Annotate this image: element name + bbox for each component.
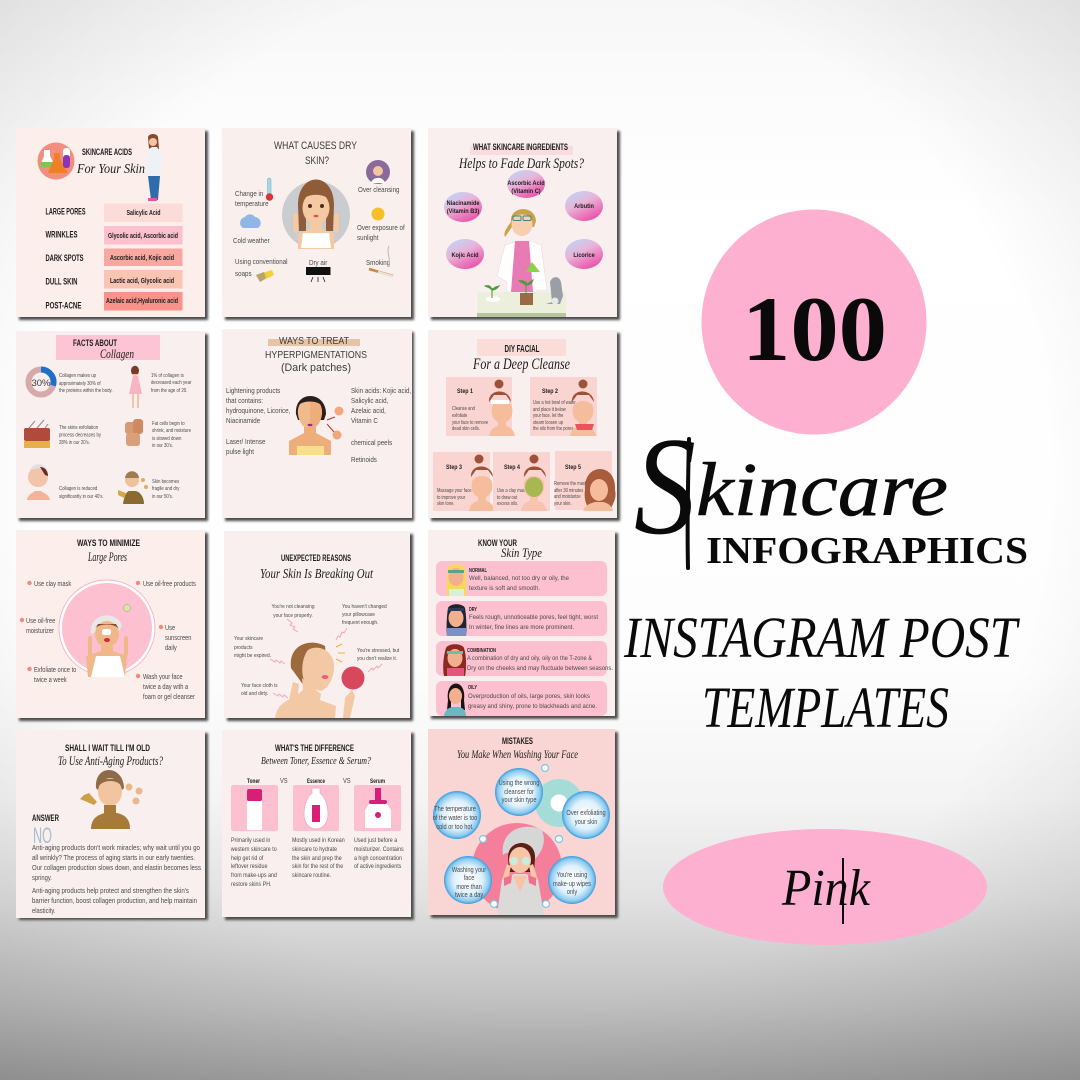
reason: stressed: you don't realize it. [357,656,397,662]
illustration: woman with dark patches [289,396,344,455]
tip: wash face: Wash your face [143,674,183,681]
panel: DIY facial [428,330,620,521]
tip: sunscreen: sunscreen [165,635,192,642]
heading: ingredients: Helps to Fade Dark Spots? [458,156,584,172]
title: Skincare: kincare [696,448,948,532]
text: serum description [354,838,404,870]
cause: soaps: soaps [235,271,252,278]
panel: hyperpigmentations [222,329,414,521]
heading: skincare acids: For Your Skin [76,162,145,177]
text: toner description: help get rid of [231,856,264,862]
fact: fifties: Skin becomes [152,479,180,485]
column labels: VS [280,778,288,785]
panel: facts about collagen [16,331,208,521]
text: essence description [292,838,345,879]
heading: collagen: FACTS ABOUT [73,338,117,348]
tip: exfoliate: Exfoliate once to [34,667,77,674]
text: serum description: Used just before a [354,838,398,844]
fact: fifties: fragile and dry [152,486,180,492]
table: acid rows: Glycolic acid, Ascorbic acid [108,231,178,240]
heading: mistakes: MISTAKES [502,736,533,747]
heading: hyperpigmentation: HYPERPIGMENTATIONS [265,350,367,361]
cause: temperature [235,178,273,208]
tip: oil-free moisturizer: moisturizer [26,628,55,635]
step 2: Use a hot bowl of water [533,400,576,405]
text: right treatments: Skin acids: Kojic acid, [351,388,411,395]
tip: exfoliate: twice a week [34,677,68,684]
bubble: make-up wipes: You're using [557,872,588,879]
fact: fat cells: Fat cells begin to [152,421,185,427]
text: right treatments: chemical peels [351,440,393,447]
icon: woman side face [27,464,50,500]
reason: expired products: Your skincare [234,636,263,642]
icon: essence bottle [293,785,339,831]
row: combination skin: Dry on the cheeks and may fluctuate between seasons. [467,665,613,672]
step 1 [446,377,515,436]
title: Infographics: INFOGRAPHICS [706,530,1028,572]
reason: pillowcase: your pillowcase [342,612,375,618]
tip: wash face [136,674,196,701]
step 2: your face. let the [533,413,564,418]
tip: exfoliate [27,667,77,684]
fact: exfoliation [59,425,102,446]
row: normal skin: texture is soft and smooth. [469,585,540,592]
icon: serum bottle [354,785,401,831]
heading: difference: WHAT'S THE DIFFERENCE [275,743,354,754]
table: acid rows: Lactic acid, Glycolic acid [110,276,174,285]
cause: smoking [366,246,393,276]
speech bubbles: (Vitamin B3) [447,208,479,215]
bubble: water temperature [433,791,481,839]
row: normal skin: NORMAL [469,568,487,574]
illustration: scientist [497,209,547,292]
fact: fat cells: shrink, and moisture [152,428,191,434]
bubble: washing too often: face [464,875,475,882]
fact: 30 percent: approximately 30% of [59,381,101,387]
reason: face cloth [241,683,288,698]
cause: cold weather: Cold weather [233,238,270,245]
heading: large pores [77,538,140,564]
text: right treatments [351,388,411,464]
table: acid rows [46,204,182,312]
badge: 100 [702,210,926,434]
row: combination skin [436,641,613,676]
fact: one percent: decreased each year [151,380,192,386]
column labels: Essence [307,778,325,785]
illustration: woman in towel [282,180,350,249]
backdrop circles [472,779,583,913]
bubble: over exfoliating: your skin [575,819,598,826]
icon: girl in pink dress [129,366,142,408]
fact: fifties [152,479,180,500]
reason: expired products: might be expired. [234,653,271,659]
illustration: lab bench [477,277,566,317]
icon: toner bottle [231,785,278,831]
illustration: woman in bathrobe [497,827,544,915]
panel: washing mistakes [428,729,618,918]
panel: skin breaking out [224,531,413,721]
bubble: wrong cleanser [495,768,543,816]
small water drops [480,764,562,908]
fact: fat cells: is slowed down [152,436,182,442]
panel: dark spot ingredients [428,128,620,320]
step 5: after 30 minutes [554,488,584,493]
table: acid rows: Salicylic Acid [126,208,161,217]
column labels [247,778,385,785]
answer text: Anti-aging products don't work miracles; why wait until you go [32,844,200,852]
reason: pillowcase [336,604,387,640]
chart: 30 percent donut: 30% [31,378,51,389]
tip: oil-free moisturizer: Use oil-free [26,618,56,625]
answer text: all wrinkly? The process of aging starts in our early twenties. [32,854,195,862]
heading: anti-aging [58,743,163,768]
row: dry skin: In winter, fine lines are more prominent. [469,624,574,631]
heading: DIY facial: For a Deep Cleanse [472,356,570,373]
bubble: water temperature: The temperature [434,806,476,813]
title: Skincare: S [634,409,696,564]
bubble: wrong cleanser: cleanser for [504,789,534,796]
speech bubbles: (Vitamin C) [511,188,541,195]
icon: flasks [38,142,74,180]
chart: 30 percent donut [28,370,54,394]
step 2: Step 2 [542,389,559,395]
heading: breaking out [260,553,374,581]
text: left treatments: that contains: [226,398,263,405]
step 3: skin tone. [437,501,455,506]
badge: 100: 100 [742,278,887,380]
text: right treatments: Salicylic acid, [351,398,388,405]
answer text: Our collagen production slows down, and elastin becomes less [32,864,201,872]
cause: sunlight [357,208,405,242]
reason: expired products [234,636,285,664]
text: right treatments: Azelaic acid, [351,408,386,415]
fact: exfoliation: process decreases by [59,432,102,439]
bubble: make-up wipes: only [567,889,578,896]
cause: temperature: temperature [235,201,269,208]
text: serum description: of active ingredients [354,864,401,870]
cause: soaps [235,259,288,282]
subtitle: Instagram post templates: INSTAGRAM POST [623,605,1020,670]
column labels: Toner [247,778,260,785]
bubble: make-up wipes: make-up wipes [553,881,591,888]
answer text: Anti-aging products help protect and strengthen the skin's [32,887,189,895]
text: essence description: the skin and prep the [292,856,342,862]
answer text: elasticity. [32,908,56,915]
panel: anti-aging [16,730,208,920]
bubble: wrong cleanser: your skin type [502,797,537,804]
speech bubbles: Niacinamide [447,200,480,207]
heading: breaking out: Your Skin Is Breaking Out [260,566,374,581]
heading: collagen [56,335,160,361]
heading: dry skin: WHAT CAUSES DRY [274,140,358,152]
subtitle: Instagram post templates: TEMPLATES [702,675,949,740]
tip: wash face: foam or gel cleanser [143,694,196,701]
text: left treatments [226,388,290,456]
text: toner description: leftover residue [231,864,268,870]
panel: skincare acids [16,128,208,320]
reason: pillowcase: frequent enough. [342,620,378,626]
heading: dry skin [274,140,358,167]
cause: sunlight: sunlight [357,235,379,242]
heading: dry skin: SKIN? [305,155,329,167]
step 2: and place it below [533,407,566,412]
reason: stressed [357,648,400,672]
heading: mistakes [457,736,578,761]
text: toner description: Primarily used in [231,838,270,844]
fact: 30 percent: the proteins within the body. [59,388,113,394]
tip: sunscreen [159,625,192,652]
step 3: Step 3 [446,465,463,471]
reason: stressed: You're stressed, but [357,648,400,654]
cause: over cleansing: Over cleansing [358,187,400,194]
speech bubbles: Arbutin [574,203,594,210]
speech bubbles: Licorice [573,252,595,259]
heading: breaking out: UNEXPECTED REASONS [281,553,351,563]
step 1: dead skin cells. [452,426,480,431]
step 1: Step 1 [457,389,474,395]
text: essence description: skin for the rest of the [292,864,344,870]
bubble: washing too often: Washing your [452,867,486,874]
heading: anti-aging: SHALL I WAIT TILL I'M OLD [65,743,150,754]
fact: one percent: 1% of collagen is [151,373,184,379]
tip: oil-free products: Use oil-free products [143,581,196,588]
step 3: Massage your face [437,488,472,493]
panel: large pores [16,530,208,721]
table: acid rows: WRINKLES [46,230,78,240]
heading: large pores: Large Pores [87,549,127,564]
answer label [32,813,59,848]
fact: fat cells: in our 30's. [152,443,173,449]
icon: doctor [146,134,162,201]
reason: not cleansing [271,604,315,632]
speech bubbles [444,170,603,269]
row: oily skin [436,681,607,716]
fact: one percent: from the age of 20. [151,388,187,394]
table: acid rows: DULL SKIN [46,276,78,288]
heading: skin type: KNOW YOUR [478,538,517,549]
step 3: to improve your [437,495,466,500]
title: Skincare [634,409,948,568]
text: toner description: western skincare to [230,847,277,853]
step 3 [433,452,495,511]
cause: dry air: Dry air [309,260,328,267]
heading: anti-aging: To Use Anti-Aging Products? [58,753,163,768]
cause: soaps: Using conventional [235,259,288,266]
bubble: water temperature: of the water is too [433,815,478,822]
row: dry skin [436,601,607,636]
answer label: ANSWER [32,813,59,824]
cause: temperature: Change in [235,191,263,198]
reason: face cloth: old and dirty. [241,691,268,697]
heading: collagen: Collagen [100,346,134,361]
heading: skincare acids: SKINCARE ACIDS [82,147,132,157]
fact: 30 percent: Collagen makes up [59,373,96,379]
tip: sunscreen: daily [165,645,178,652]
tip: oil-free moisturizer [20,618,56,635]
bubble: water temperature: cold or too hot. [436,824,474,831]
text: toner description [230,838,277,888]
reason: not cleansing: your face properly. [273,613,313,619]
table: acid rows: Azelaic acid,Hyaluronic acid [106,296,178,305]
step 1: exfoliate [452,413,468,418]
tip: clay mask: Use clay mask [34,581,72,588]
bubble: wrong cleanser: Using the wrong [499,780,540,787]
step 2: the oils from the pores [533,426,574,431]
badge: pink: Pink [781,860,871,917]
bubble: washing too often: more than [456,884,482,891]
fact: exfoliation: 28% in our 20's. [59,440,90,446]
step 4: Step 4 [504,465,521,471]
heading: large pores: WAYS TO MINIMIZE [77,538,140,549]
row: oily skin: Overproduction of oils, large pores, skin looks [468,693,591,700]
text: left treatments: hydroquinone, Licorice, [226,408,290,415]
answer label: NO [33,823,52,848]
cause: sunlight: Over exposure of [357,225,405,232]
text: left treatments: Niacinamide [226,418,260,425]
row: oily skin: greasy and shiny, prone to blackheads and acne. [468,703,597,710]
text: toner description: restore skins PH. [231,882,272,888]
tip: sunscreen: Use [165,625,176,632]
bubble: over exfoliating [562,791,610,839]
row: dry skin: Feels rough, unnoticeable pores, feel tight, worst [469,614,598,621]
step 5 [554,451,616,511]
subtitle: Instagram post templates [623,605,1020,740]
fact: exfoliation: The skins exfoliation [59,425,99,431]
text: serum description: a high concentration [354,856,402,862]
heading: hyperpigmentation: WAYS TO TREAT [279,336,349,347]
text: left treatments: Lightening products [226,388,281,395]
fact: forties: significantly in our 40's. [59,494,104,500]
panel: know your skin type [428,530,618,719]
illustration: woman with mirror [275,643,364,718]
bubble: washing too often [444,856,492,904]
table: acid rows: LARGE PORES [46,206,86,218]
cause: over cleansing [358,160,400,194]
panel: toner essence serum [222,730,414,920]
bubble: make-up wipes [548,856,596,904]
step 4: Use a clay mask [497,488,528,493]
table: acid rows: POST-ACNE [46,300,82,312]
text: left treatments: pulse light [226,449,254,456]
fact: fat cells [152,421,191,449]
text: right treatments: Vitamin C [351,418,378,425]
step 1: Cleanse and [452,406,475,411]
illustration: older woman [80,770,142,829]
reason: not cleansing: You're not cleansing [271,604,315,610]
reason: face cloth: Your face cloth is [241,683,278,689]
panel: what causes dry skin [222,128,414,320]
text: right treatments: Retinoids [351,457,377,464]
cause: smoking: Smoking [366,260,390,267]
badge: pink [663,829,987,945]
heading: hyperpigmentation [265,336,367,374]
bubble: washing too often: twice a day [455,892,484,899]
heading: DIY facial [472,339,570,373]
heading: skin type: Skin Type [501,545,542,560]
column labels: Serum [370,778,385,785]
column labels: VS [343,778,351,785]
text: toner description: from make-ups and [231,873,277,879]
text: serum description: moisturizer. Contains [354,847,404,853]
reason: pillowcase: You haven't changed [342,604,387,610]
icon: fat cells [125,419,143,446]
step 5: Step 5 [565,465,582,471]
step 5: and moisturize [554,494,581,499]
fact: one percent [151,373,192,394]
fact: forties [59,486,104,500]
text: left treatments: Laser/ Intense [226,439,266,446]
bubble: over exfoliating: Over exfoliating [566,810,606,817]
text: essence description: Mostly used in Korean [292,838,345,844]
answer text: springy. [32,875,52,882]
icon: skin cross section [24,420,50,448]
table: acid rows: DARK SPOTS [46,253,84,264]
speech bubbles: Ascorbic Acid [507,180,545,187]
tip: wash face: twice a day with a [143,684,189,691]
answer text: barrier function, boost collagen production, and help maintain [32,897,197,905]
text: essence description: skincare routine. [292,873,331,879]
row: combination skin: COMBINATION [467,648,496,654]
step 4: to draw out [497,495,518,500]
step 5: Remove the mask [554,481,588,486]
heading: ingredients [458,142,584,172]
heading: hyperpigmentation: (Dark patches) [281,362,351,374]
row: normal skin [436,561,607,596]
heading: mistakes: You Make When Washing Your Face [457,749,578,761]
row: oily skin: OILY [468,685,477,691]
heading: ingredients: WHAT SKINCARE INGREDIENTS [473,142,568,152]
heading: difference [261,743,371,767]
step 1: your face to remove [452,420,489,425]
heading: difference: Between Toner, Essence & Serum? [261,755,371,767]
step 2 [530,377,597,436]
reason: expired products: products [234,645,253,651]
heading: skincare acids [76,147,145,177]
illustration: woman in towel with circle [59,580,155,677]
row: dry skin: DRY [469,607,477,613]
fact: fifties: in our 50's. [152,494,173,500]
table: acid rows: Ascorbic acid, Kojic acid [110,253,174,262]
step 5: your skin. [554,501,572,506]
fact: 30 percent [59,373,113,394]
row: normal skin: Well, balanced, not too dry or oily, the [469,575,569,582]
heading: skin type [478,538,542,560]
text: essence description: skincare to hydrate [292,847,338,853]
answer text [32,844,201,915]
cause: cold weather [233,214,270,245]
step 2: steam loosen up [533,420,563,425]
step 4 [493,452,550,511]
row: combination skin: A combination of dry and oily, oily on the T-zone & [467,655,593,662]
step 4: excess oils. [497,501,518,506]
speech bubbles: Kojic Acid [452,252,479,259]
heading: DIY facial: DIY FACIAL [504,344,540,355]
cause: dry air [306,260,330,282]
fact: forties: Collagen is reduced [59,486,98,492]
icon: older woman [118,471,148,504]
